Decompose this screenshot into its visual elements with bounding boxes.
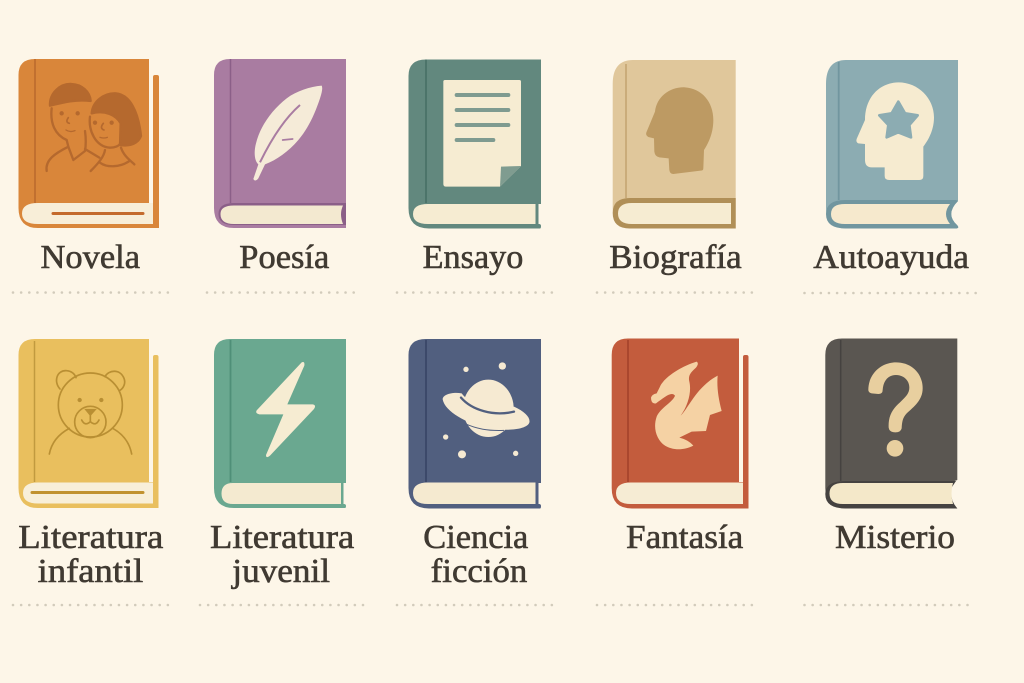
icon: feather [253,86,322,181]
divider: dotted [200,604,363,606]
divider: dotted [804,604,975,606]
divider: dotted [13,604,169,606]
book: teal cover [408,60,541,228]
icon: couple portrait [46,84,141,171]
divider: dotted [597,291,760,294]
divider: dotted [804,292,976,294]
label: Ciencia ficción: ficción [431,553,527,590]
divider: dotted [397,291,552,294]
label: Misterio: Misterio [835,519,955,556]
divider: dotted [597,604,760,606]
icon: head with star [856,82,934,180]
book card: Literatura juvenil [200,339,363,605]
book card: Biografía [597,60,760,292]
book card: Novela [13,59,169,292]
icon: question mark [868,362,923,457]
book: red cover [612,338,748,508]
label: Literatura infantil: Literatura [18,519,163,556]
book card: Literatura infantil [13,339,169,605]
book: navy cover [408,339,541,508]
book: charcoal cover [825,338,957,508]
label: Literatura juvenil: juvenil [231,553,330,590]
label: Literatura juvenil [210,519,354,590]
book card: Autoayuda [804,60,976,293]
label: Biografía: Biografía [609,239,742,276]
book: yellow cover [18,339,158,508]
label: Literatura juvenil: Literatura [210,519,354,556]
label: Literatura infantil [18,519,163,590]
book card: Ensayo [397,60,552,292]
book card: Misterio [804,338,975,605]
book: blue-grey cover [826,60,958,228]
label: Novela: Novela [40,239,140,276]
icon: document [443,80,521,187]
book card: Poesía [207,59,355,292]
label: Poesía: Poesía [239,239,329,276]
label: Fantasía: Fantasía [626,519,743,556]
book: tan cover [613,60,736,228]
label: Ciencia ficción: Ciencia [423,519,528,556]
icon: lightning bolt [256,362,315,457]
icon: teddy bear [49,371,132,454]
book: purple cover [214,59,346,228]
book: orange cover [18,59,159,228]
icon: dragon silhouette [651,362,722,449]
label: Ciencia ficción [423,519,528,590]
book card: Ciencia ficción [397,339,552,605]
label: Ensayo: Ensayo [423,239,523,276]
divider: dotted [207,291,355,294]
label: Autoayuda: Autoayuda [813,239,969,276]
divider: dotted [13,291,169,294]
icon: ringed planet and stars [443,362,530,458]
book: green cover [214,339,346,508]
label: Literatura infantil: infantil [38,553,143,590]
icon: head silhouette [646,87,713,174]
book card: Fantasía [597,338,760,605]
divider: dotted [397,604,552,606]
